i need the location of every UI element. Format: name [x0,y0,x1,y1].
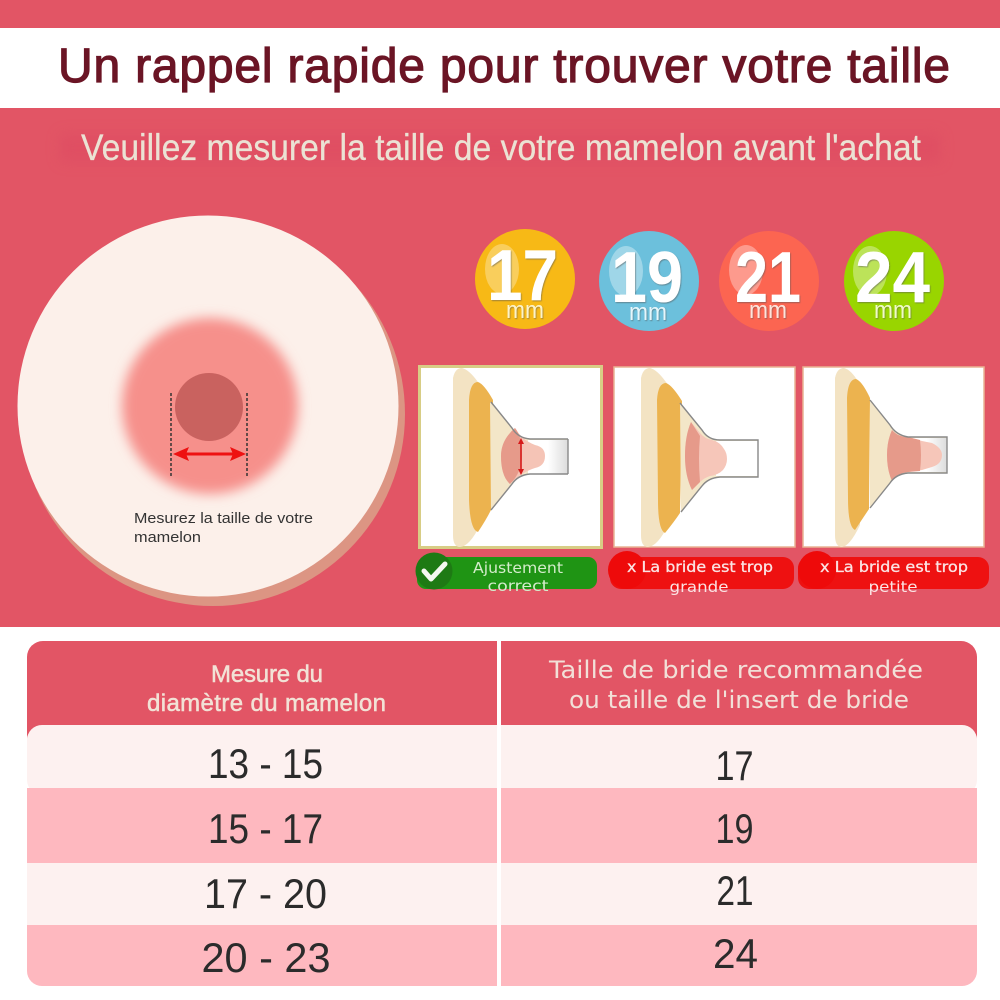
table header [27,641,977,751]
row 20-23 / 24 [202,930,758,981]
row 17-20 / 21: 21 [716,867,754,914]
row 15-17 / 19: 19 [716,805,754,852]
areola and nipple [501,428,545,484]
panel: flange too small [798,367,989,596]
column divider [497,641,501,986]
funnel [680,403,758,512]
row 15-17 / 19 [208,805,754,852]
flange rim [847,379,870,530]
panel: correct fit [416,366,602,595]
row 20-23 / 24: 20 - 23 [202,934,330,981]
funnel [870,400,947,508]
funnel [490,402,568,510]
badge: 17 mm: 17 [487,236,558,316]
row 17-20 / 21 [204,867,754,917]
arrow: size indicator [518,438,524,475]
table header: ou taille de l'insert de bride [569,686,909,714]
badge: 24 mm: mm [874,297,912,324]
label: flange too large [608,551,794,596]
table header: diamètre du mamelon [147,690,386,717]
badge: 24 mm [844,231,944,331]
table header: Mesure du [211,661,323,688]
label: correct fit [416,552,597,595]
title: Un rappel rapide pour trouver votre taille [58,40,950,93]
caption [134,511,313,546]
label: flange too large: x La bride est trop [627,558,773,576]
caption: Mesurez la taille de votre [134,511,313,527]
caption: mamelon [134,530,201,546]
label: flange too small: x La bride est trop [820,558,968,576]
size badges [475,229,944,331]
row 15-17 / 19: 15 - 17 [208,805,323,852]
flange rim [469,382,493,532]
badge: 17 mm [475,229,575,329]
panel: flange too large [608,367,795,596]
areola [122,318,298,494]
subtitle: Veuillez mesurer la taille de votre mamelon avant l'achat [81,126,922,168]
nipple [175,373,243,441]
title [0,28,1000,108]
badge: 21 mm [719,231,819,331]
breast outline [641,368,668,547]
flange rim [657,383,682,533]
arrow: diameter [173,447,246,461]
row 13-15 / 17 [208,740,754,789]
badge: 21 mm: 21 [735,238,801,318]
badge: 19 mm: 19 [611,238,683,318]
badge: 19 mm: mm [629,299,667,326]
table: size chart [27,641,977,986]
panel: nipple measurement diagram [18,216,405,606]
row 13-15 / 17: 17 [716,742,754,789]
label: correct fit: correct [488,577,549,595]
row 17-20 / 21: 17 - 20 [204,870,327,917]
badge: 21 mm: mm [749,297,787,324]
areola and nipple [887,430,942,481]
areola and nipple [685,422,727,490]
badge: 17 mm: mm [506,297,544,324]
label: correct fit: Ajustement [473,559,563,577]
table rows [27,725,977,986]
row 13-15 / 17: 13 - 15 [208,740,323,787]
pink background panel [0,0,1000,627]
row 20-23 / 24: 24 [713,930,758,977]
label: flange too small: petite [868,578,918,596]
breast outline [835,368,860,547]
breast outline [453,368,480,547]
label: flange too large: grande [670,578,728,596]
badge: 19 mm [599,231,699,331]
badge: 24 mm: 24 [855,238,930,318]
label: flange too small [798,551,989,596]
measuring guide lines [171,393,247,478]
table header: Taille de bride recommandée [548,656,923,684]
